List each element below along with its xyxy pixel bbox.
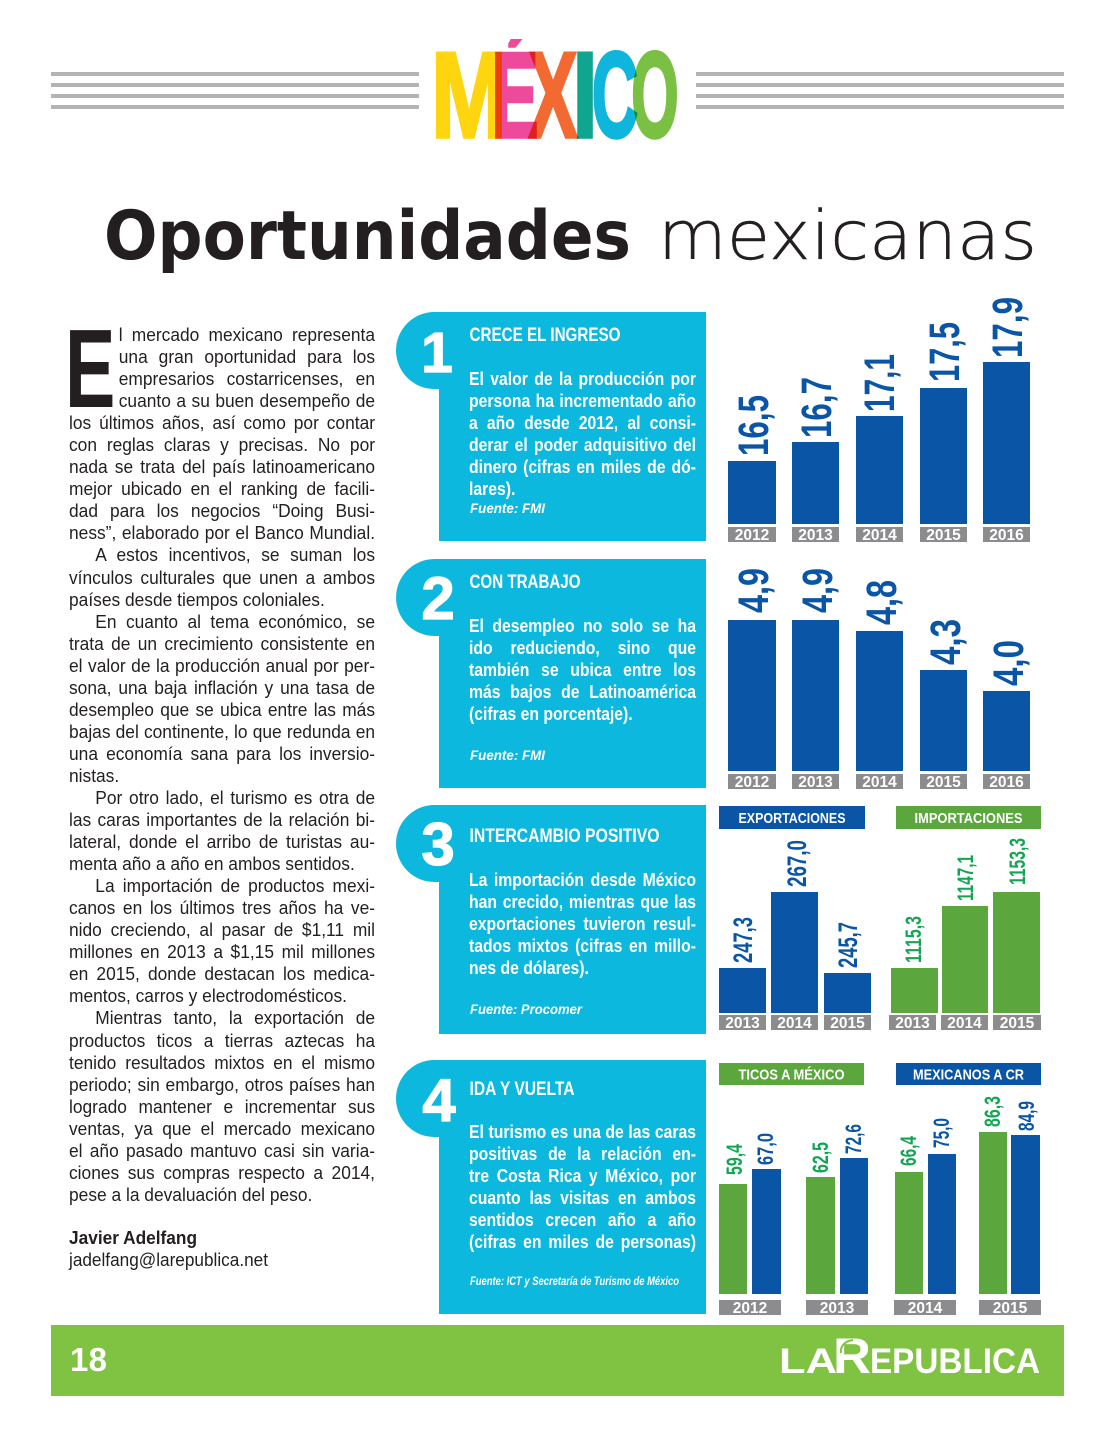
text block: article: La importación de productos mexi- [95,875,375,896]
text block: article: A estos incentivos, se suman los [95,544,375,565]
logo: La República [779,1328,1040,1384]
panel 2: con trabajo [396,559,706,788]
panel 1 body text: dinero (cifras en miles de dó- [469,457,696,477]
text block: article: En cuanto al tema económico, se [95,611,375,632]
panel 3 body text: exportaciones tuvieron resul- [469,914,696,934]
text block: article: ness”, elaborado por el Banco Mundial. [69,522,375,543]
panel 3 body text: tados mixtos (cifras en millo- [469,936,696,956]
panel 1: crece el ingreso: CRECE EL INGRESO [470,325,620,346]
page number: 18 [70,1341,107,1378]
chart 4: turistas: 72,6 [841,1124,866,1154]
chart 4: turistas: 86,3 [980,1096,1005,1127]
chart 3: exportaciones: 247,3 [728,917,758,963]
chart 4: turistas: 2014 [908,1300,943,1317]
chart 3: exportaciones: 2015 [830,1015,865,1032]
chart 3: importaciones: 2013 [895,1015,930,1032]
panel 1 body text: El valor de la producción por [469,369,696,389]
chart 2: desempleo bars: 2015 [926,774,961,791]
logo: MÉXICO: I [572,27,598,163]
text block: article: trata de un crecimiento consistente en [69,633,375,654]
logo: La República: R [833,1328,871,1384]
panel 4 body text: sentidos crecen año a año [469,1210,696,1230]
header rules and México logo [51,27,1064,164]
panel 2 body text: (cifras en porcentaje). [469,704,633,724]
panel 2 body text: también se ubica entre los [469,660,696,680]
chart 1: ingreso bars: 2012 [735,527,769,544]
panel 4 body text: El turismo es una de las caras [469,1122,696,1142]
chart 1: ingreso bars [728,297,1032,544]
panel 4 body text: cuanto las visitas en ambos [469,1188,696,1208]
chart 2: desempleo bars: 4,0 [985,640,1033,686]
author byline: Javier Adelfang [69,1228,197,1248]
chart 2: desempleo bars: 2016 [989,774,1024,791]
text block: article: vínculos culturales que unen a ambos [69,567,375,588]
panel 3 body text [469,870,696,978]
panel 1: crece el ingreso: 1 [421,321,453,385]
chart 4: turistas: 62,5 [808,1142,833,1173]
text block: article: mentos, carros y electrodomésticos. [69,985,347,1006]
panel 3 body text: La importación desde México [469,870,696,890]
chart 1: ingreso bars: 17,9 [984,297,1032,358]
panel 2 body text: ido reduciendo, sino que [469,638,696,658]
text block: article: periodo; sin embargo, otros países han [69,1074,375,1095]
chart 2: desempleo bars: 4,9 [730,568,778,613]
logo: MÉXICO: M [431,27,507,163]
text block: article: una gran oportunidad para los [119,346,375,367]
text block: article: empresarios costarricenses, en [119,368,375,389]
logo: MÉXICO [436,39,677,140]
logo: MÉXICO: C [592,27,638,163]
panel 3: intercambio positivo: INTERCAMBIO POSITIVO [470,826,660,847]
text block: article: cuanto a su buen desempeño de [119,390,375,411]
panel 4 body text: (cifras en miles de personas) [469,1232,696,1252]
footer bar [51,1325,1064,1396]
panel 4: ida y vuelta: IDA Y VUELTA [470,1079,575,1100]
text block: article: mejor ubicado en el ranking de facili- [69,478,375,499]
text block: article: ciones sus compras respecto a 2014, [69,1162,375,1183]
text block: article: el valor de la producción anual por per- [69,655,375,676]
title: mexicanas [658,197,1037,276]
chart 2: desempleo bars: 2013 [798,774,833,791]
chart 4: turistas [719,1063,1041,1317]
panel 3: intercambio positivo: 3 [421,811,455,878]
text block: article: una economía sana para los inversio- [69,743,375,764]
panel 3 body text: han crecido, mientras que las [469,892,696,912]
text block: article: canos en los últimos tres años ha ve- [69,897,375,918]
text block: article: logrado mantener e incrementar sus [69,1096,375,1117]
text block: article: millones en 2013 a $1,15 mil millones [69,941,375,962]
chart 4: turistas: 2013 [820,1300,855,1317]
panel 4: ida y vuelta: Fuente: ICT y Secretaría de Turismo de México [470,1274,679,1288]
text block: article [69,324,376,1205]
chart 3: importaciones: IMPORTACIONES [914,810,1022,827]
chart 4: turistas: 84,9 [1014,1101,1039,1131]
chart 3: exportaciones: 267,0 [782,840,812,887]
chart 2: desempleo bars: 2012 [735,774,769,791]
text block: article: bajas del continente, lo que redunda en [69,721,375,742]
chart 3: exportaciones: 2014 [777,1015,812,1032]
author byline [68,1228,268,1270]
panel 2: con trabajo: CON TRABAJO [470,572,580,593]
panel 1 body text: derar el poder adquisitivo del [469,435,696,455]
text block: article: en 2015, donde destacan los medica- [69,963,375,984]
legend: mexicanos a cr [896,1063,1041,1085]
text block: article: Por otro lado, el turismo es otra de [95,787,375,808]
text block: article: desempleo que se ubica entre las más [69,699,375,720]
legend: ticos a méxico: TICOS A MÉXICO [738,1066,845,1084]
text block: article: menta año a año en ambos sentidos. [69,853,355,874]
text block: article: Mientras tanto, la exportación de [95,1007,375,1028]
text block: article: los últimos años, así como por contar [69,412,375,433]
chart 2: desempleo bars: 4,3 [922,619,970,665]
text block: article: ventas, ya que el mercado mexicano [69,1118,375,1139]
drop cap E: E [65,308,115,432]
text block: article: las caras importantes de la relación bi- [69,809,375,830]
text block: article: nido creciendo, al pasar de $1,11 mil [69,919,375,940]
panel 3: intercambio positivo [396,805,706,1034]
panel 2 body text: El desempleo no solo se ha [469,616,696,636]
panel 2: con trabajo: Fuente: FMI [470,747,546,763]
panel 2 body text [469,616,696,724]
chart 1: ingreso bars: 16,5 [730,395,778,456]
panel 1: crece el ingreso: Fuente: FMI [470,500,546,516]
panel 4 body text: positivas de la relación en- [469,1144,696,1164]
text block: article: el año pasado mantuvo casi sin varia- [69,1140,375,1161]
chart 4: turistas: 2015 [993,1300,1028,1317]
text block: article: tenido resultados mixtos en el mismo [69,1052,375,1073]
panel 2: con trabajo: 2 [421,565,455,632]
chart 1: ingreso bars: 17,5 [921,322,969,382]
logo: MÉXICO: O [631,28,679,164]
chart 3: exportaciones: 2013 [725,1015,760,1032]
chart 1: ingreso bars: 17,1 [856,354,904,412]
chart 3: importaciones: 1115,3 [901,916,926,963]
panel 3: intercambio positivo: Fuente: Procomer [470,1001,583,1017]
panel 4: ida y vuelta [396,1060,706,1314]
chart 3: importaciones: 2014 [947,1015,982,1032]
panel 4: ida y vuelta: 4 [422,1067,456,1134]
panel 1 body text [469,369,696,499]
panel 3 body text: nes de dólares). [469,958,589,978]
panel 1 body text: lares). [469,479,515,499]
chart 3: importaciones: 1147,1 [953,855,978,901]
chart 1: ingreso bars: 16,7 [793,377,841,438]
panel 2 body text: más bajos de Latinoamérica [469,682,696,702]
chart 3: importaciones: 2015 [1000,1015,1035,1032]
chart 1: ingreso bars: 2014 [862,527,897,544]
text block: article: nada se trata del país latinoamericano [69,456,375,477]
chart 2: desempleo bars: 4,9 [794,568,842,613]
title [104,197,1037,276]
chart 3: exportaciones: EXPORTACIONES [738,810,846,827]
text block: article: nistas. [69,765,119,786]
text block: article: lateral, donde el arribo de turistas au- [69,831,375,852]
text block: article: sona, una baja inflación y una tasa de [69,677,375,698]
author byline: jadelfang@larepublica.net [68,1249,268,1270]
panel 4 body text [469,1122,696,1252]
title: Oportunidades [104,197,631,276]
panel 4 body text: tre Costa Rica y México, por [469,1166,696,1186]
chart 3: importaciones [889,806,1041,1032]
panel 1 body text: a año desde 2012, al consi- [469,413,696,433]
chart 4: turistas: 2012 [733,1300,767,1317]
panel 1 body text: persona ha incrementado año [469,391,696,411]
chart 3: exportaciones: 245,7 [833,922,863,968]
legend: mexicanos a cr: MEXICANOS A CR [913,1066,1024,1084]
text block: article: pese a la devaluación del peso. [69,1184,312,1205]
chart 4: turistas: 66,4 [896,1135,921,1166]
chart 2: desempleo bars: 2014 [862,774,897,791]
chart 4: turistas: 59,4 [722,1143,747,1175]
chart 1: ingreso bars: 2015 [926,527,961,544]
panel 1: crece el ingreso [396,312,706,541]
chart 2: desempleo bars [728,568,1033,791]
legend: ticos a méxico [719,1063,864,1085]
chart 1: ingreso bars: 2013 [798,527,833,544]
chart 1: ingreso bars: 2016 [989,527,1024,544]
chart 3: exportaciones [719,806,871,1032]
text block: article: l mercado mexicano representa [119,324,375,345]
logo: La República: LA [779,1342,837,1381]
logo: MÉXICO: É [491,28,539,164]
chart 4: turistas: 75,0 [929,1118,954,1148]
logo: La República: EPUBLICA [870,1342,1040,1381]
text block: article: países desde tiempos coloniales. [69,589,325,610]
chart 2: desempleo bars: 4,8 [858,580,906,625]
text block: article: dad para los negocios “Doing Busi- [69,500,375,521]
chart 3: importaciones: 1153,3 [1005,838,1030,885]
text block: article: con reglas claras y precisas. No por [69,434,375,455]
logo: MÉXICO: X [529,28,577,164]
text block: article: productos ticos a tierras aztecas ha [69,1030,375,1050]
chart 4: turistas: 67,0 [753,1133,778,1165]
